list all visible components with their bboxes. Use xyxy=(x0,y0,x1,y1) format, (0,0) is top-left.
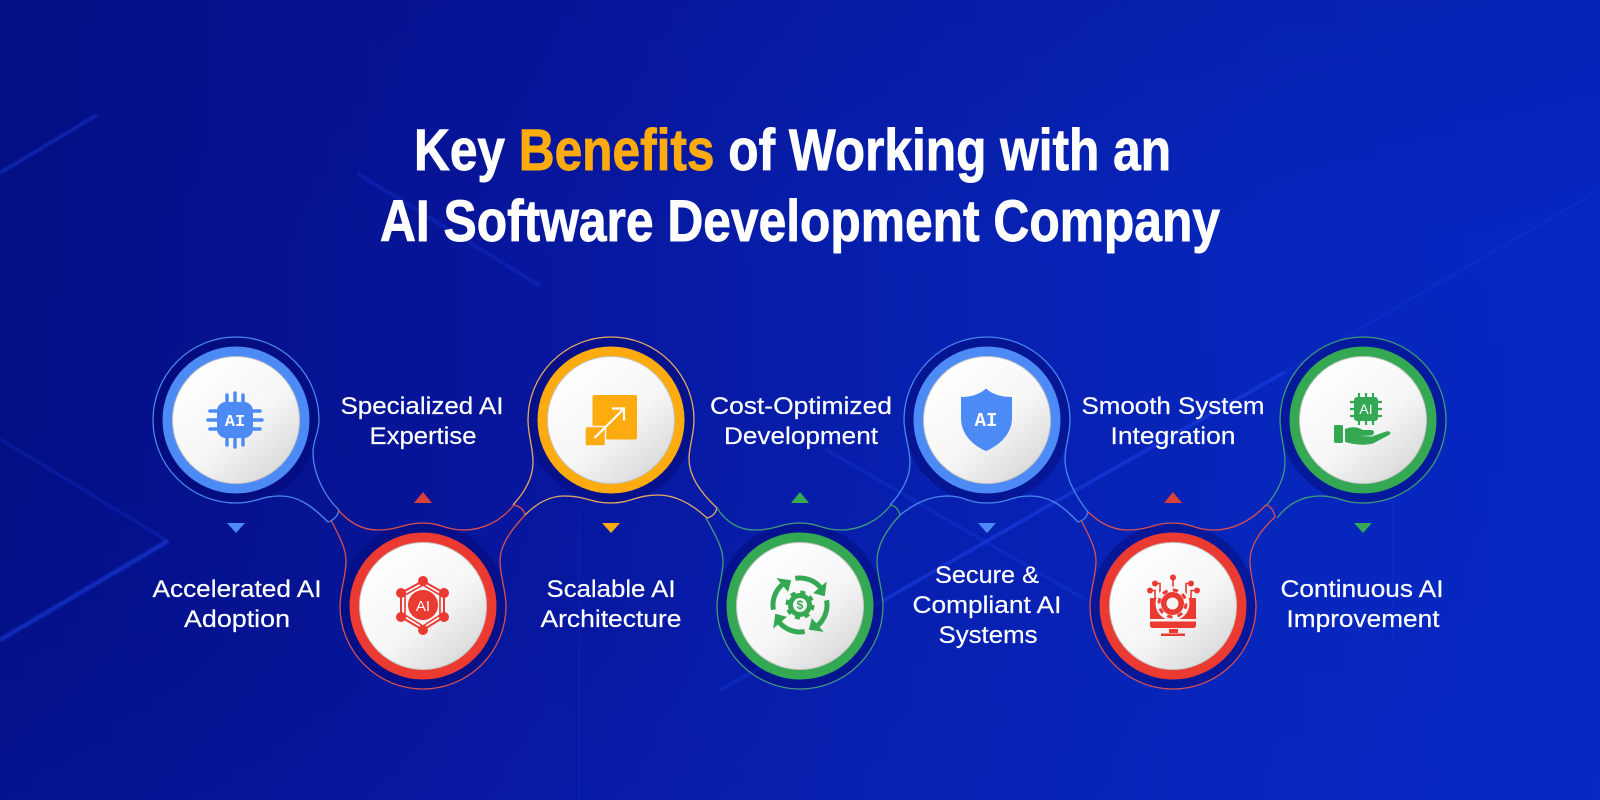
badge 6: monitor gear icon xyxy=(1100,532,1246,680)
badge 1: chip icon xyxy=(162,346,310,494)
label: Smooth System Integration: Integration xyxy=(1110,423,1236,450)
badge 2: network icon: AI xyxy=(416,598,430,615)
label: Cost-Optimized Development xyxy=(710,393,892,450)
label: Cost-Optimized Development: Development xyxy=(724,423,878,450)
label: Accelerated AI Adoption xyxy=(152,576,322,633)
badge 1: chip icon: AI xyxy=(225,413,245,432)
badge 5: shield icon xyxy=(914,346,1060,494)
badge 3: scale arrow icon xyxy=(538,346,684,494)
badge 2: network icon xyxy=(350,532,496,680)
badge 4: cost gear icon: $ xyxy=(797,598,804,612)
label: Secure & Compliant AI Systems: Systems xyxy=(938,622,1038,649)
label: Accelerated AI Adoption: Adoption xyxy=(184,606,290,633)
label: Scalable AI Architecture xyxy=(540,576,682,633)
label: Specialized AI Expertise: Specialized AI xyxy=(340,393,504,420)
label: Accelerated AI Adoption: Accelerated AI xyxy=(152,576,322,603)
label: Continuous AI Improvement: Continuous AI xyxy=(1280,576,1444,603)
badge 5: shield icon: AI xyxy=(975,410,997,432)
label: Secure & Compliant AI Systems: Secure & xyxy=(935,562,1039,589)
dark halos behind badges xyxy=(153,337,1446,689)
title: AI Software Development Company xyxy=(380,189,1220,254)
label: Smooth System Integration xyxy=(1082,393,1264,450)
title: Key Benefits of Working with an xyxy=(414,118,1171,183)
label: Continuous AI Improvement xyxy=(1280,576,1444,633)
outline: connected thin paths xyxy=(153,337,1446,689)
label: Continuous AI Improvement: Improvement xyxy=(1286,606,1440,633)
label: Scalable AI Architecture: Scalable AI xyxy=(546,576,676,603)
label: Specialized AI Expertise xyxy=(340,393,504,450)
badge 7: hand with chip icon: AI xyxy=(1359,401,1373,417)
badge 4: cost gear icon xyxy=(726,532,874,680)
label: Scalable AI Architecture: Architecture xyxy=(540,606,682,633)
title xyxy=(380,118,1220,254)
label: Specialized AI Expertise: Expertise xyxy=(370,423,476,450)
badge 7: hand with chip icon xyxy=(1290,346,1436,494)
pointer triangles xyxy=(227,492,1372,533)
label: Secure & Compliant AI Systems xyxy=(912,562,1062,649)
label: Cost-Optimized Development: Cost-Optimized xyxy=(710,393,892,420)
label: Secure & Compliant AI Systems: Compliant AI xyxy=(912,592,1062,619)
label: Smooth System Integration: Smooth System xyxy=(1082,393,1264,420)
